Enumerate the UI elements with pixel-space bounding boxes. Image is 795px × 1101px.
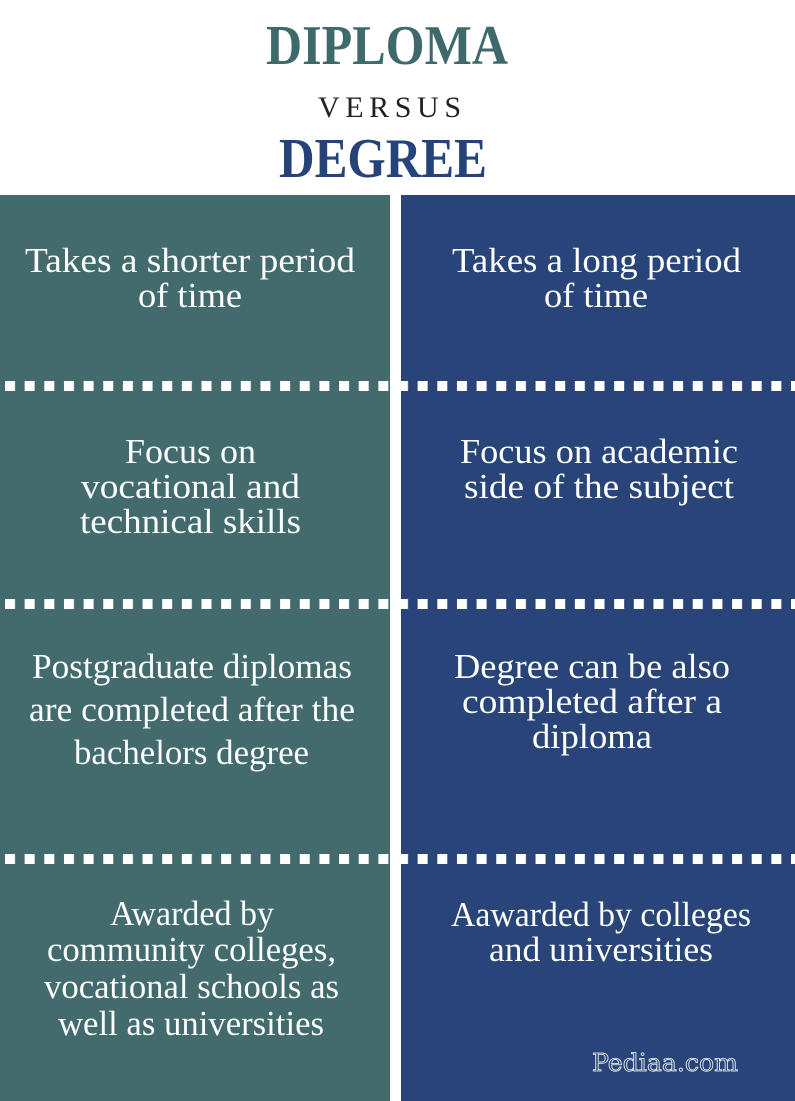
subtitle: versus: VERSUS <box>318 91 461 124</box>
text: degree row 3: diploma <box>532 717 652 756</box>
text: diploma row 1: Takes a shorter period <box>25 241 356 280</box>
text: degree row 4: and universities <box>489 930 713 969</box>
text: diploma row 2: Focus on <box>125 432 256 471</box>
text: diploma row 3: bachelors degree <box>74 733 309 772</box>
row divider 2 <box>0 599 795 609</box>
text: degree row 1: Takes a long period <box>452 241 742 280</box>
text: diploma row 4: well as universities <box>58 1004 324 1043</box>
text: diploma row 4: vocational schools as <box>44 967 339 1006</box>
row divider 3 <box>0 854 795 864</box>
text: degree row 3 <box>454 647 730 756</box>
text: diploma row 3: Postgraduate diplomas <box>32 647 352 686</box>
text: diploma row 4: community colleges, <box>47 930 336 969</box>
text: diploma row 1 <box>25 241 356 315</box>
text: degree row 4: Aawarded by colleges <box>451 895 751 934</box>
text: degree row 4 <box>451 895 751 969</box>
text: diploma row 4: Awarded by <box>110 894 274 933</box>
text: degree row 2: Focus on academic <box>460 432 738 471</box>
title: diploma: DIPLOMA <box>266 15 508 77</box>
panel: degree column <box>401 195 795 1101</box>
text: degree row 1: of time <box>544 276 648 315</box>
text: diploma row 2: vocational and <box>81 467 301 506</box>
text: diploma row 3: are completed after the <box>29 690 355 729</box>
text: diploma row 1: of time <box>138 276 242 315</box>
text: degree row 3: completed after a <box>462 682 722 721</box>
text: degree row 2: side of the subject <box>464 467 734 506</box>
row divider 1 <box>0 381 795 391</box>
text: degree row 1 <box>452 241 742 315</box>
text: diploma row 3 <box>29 647 355 772</box>
title: degree: DEGREE <box>279 128 487 190</box>
column gap <box>390 195 401 1101</box>
text: diploma row 2: technical skills <box>80 502 301 541</box>
text: degree row 2 <box>460 432 738 506</box>
watermark: pediaa.com: Pediaa.com <box>592 1049 738 1077</box>
text: diploma row 2 <box>80 432 301 541</box>
text: degree row 3: Degree can be also <box>454 647 730 686</box>
text: diploma row 4 <box>44 894 339 1043</box>
panel: diploma column <box>0 195 390 1101</box>
